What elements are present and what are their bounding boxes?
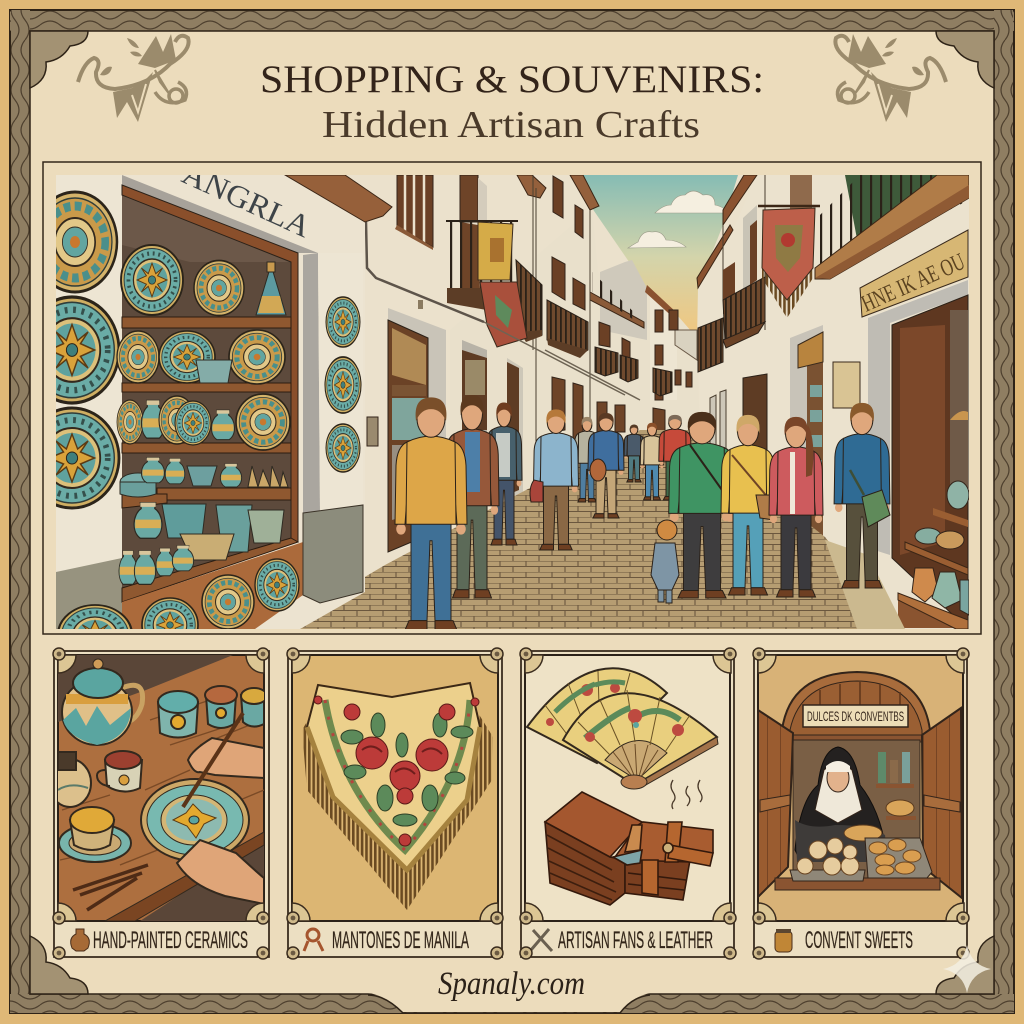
- card: artisan fans and leather: [520, 648, 736, 959]
- card: hand-painted ceramics: [49, 648, 269, 959]
- sky: [583, 175, 738, 338]
- teapot: [62, 659, 143, 745]
- leather wallets: [545, 792, 713, 905]
- steam: [671, 780, 702, 809]
- painted plate: [141, 779, 249, 861]
- flourish: top left: [78, 34, 189, 122]
- caption: [71, 927, 248, 954]
- cornice: [285, 175, 392, 222]
- shutters: [758, 708, 962, 898]
- caption: MANTONES DE MANILA: [332, 927, 469, 954]
- hands and brush: [177, 713, 264, 904]
- card: convent sweets: [753, 648, 969, 959]
- shelving interior: [122, 245, 290, 588]
- crowd of shoppers: [395, 395, 890, 630]
- right sidewalk: [825, 540, 905, 629]
- caption: [304, 927, 469, 954]
- balcony with banners: [446, 221, 542, 347]
- left shop: [56, 175, 393, 629]
- fan upper: [527, 668, 667, 763]
- upper balcony: [790, 175, 969, 279]
- ledge: [775, 878, 940, 890]
- pier: [303, 253, 320, 513]
- child: [651, 520, 679, 603]
- sign: DULCES DK CONVENTBS: [807, 708, 904, 724]
- card: hand-painted ceramics: HAND-PAINTED CERAMICS: [93, 927, 248, 954]
- caption: [531, 927, 713, 954]
- shelf of jars: [876, 752, 916, 820]
- card: convent sweets: CONVENT SWEETS: [805, 927, 913, 954]
- red banner: [758, 206, 820, 318]
- sign: [803, 705, 908, 727]
- card: mantones de manila: [287, 648, 503, 959]
- title: Hidden Artisan Crafts: [322, 104, 700, 146]
- panel: street scene: [25, 156, 981, 665]
- website footer: Spanaly.com: [438, 966, 585, 1002]
- shop sign right: HNE IK AE OU: [858, 249, 969, 317]
- buildings: left side: [366, 175, 700, 552]
- shop sign: ANGRLA: [177, 156, 317, 244]
- nun: [795, 747, 888, 862]
- icon: sparkle: [943, 945, 991, 993]
- small shop: [790, 325, 823, 548]
- ceramic plates: [56, 190, 362, 629]
- wall pipe: [366, 222, 484, 322]
- arched window: [782, 672, 930, 888]
- brushes: [73, 865, 148, 910]
- cobblestone street: [300, 430, 857, 629]
- fan lower: [563, 690, 718, 789]
- title: [260, 58, 764, 146]
- tray of sweets: [790, 825, 932, 881]
- title: SHOPPING & SOUVENIRS:: [260, 58, 764, 101]
- shop doorway with goods: [388, 308, 523, 552]
- card: artisan fans and leather: ARTISAN FANS & LEATHER: [558, 927, 713, 954]
- flourish: top right: [835, 34, 946, 122]
- floral embroidery: [314, 696, 479, 850]
- poster: [833, 362, 860, 408]
- shop door right: [868, 280, 969, 629]
- cups: [49, 686, 267, 862]
- fringe: [302, 700, 493, 910]
- caption: [775, 927, 913, 954]
- clouds: [628, 191, 727, 248]
- shawl body: [307, 683, 480, 870]
- buildings: right side: [697, 175, 969, 629]
